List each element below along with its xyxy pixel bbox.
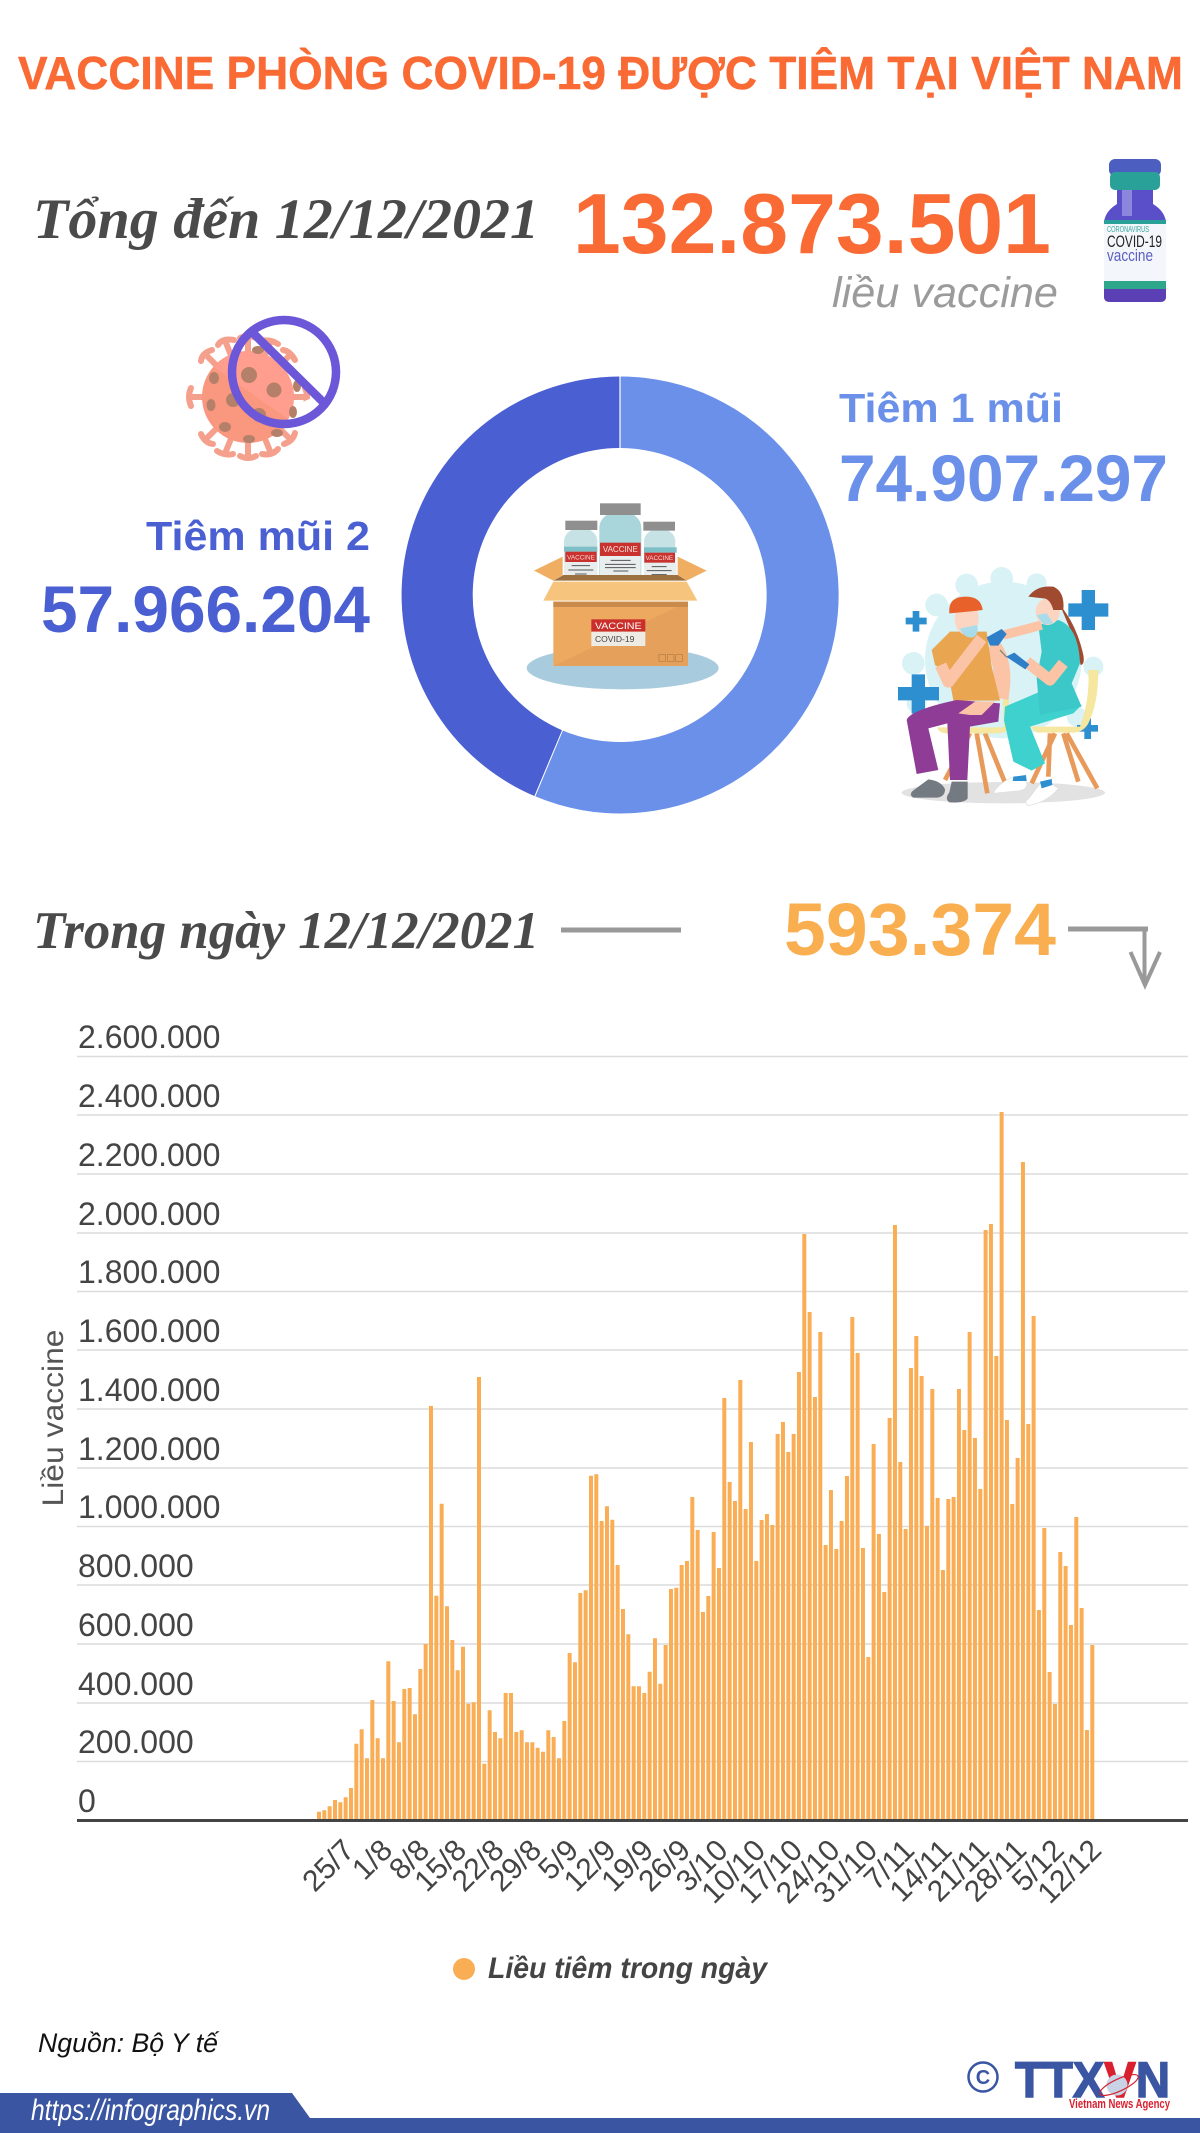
right vial	[643, 522, 677, 579]
y-axis labels: 600.000	[78, 1607, 194, 1643]
y-axis labels: 1.600.000	[78, 1313, 220, 1349]
x-axis date labels: 29/8	[483, 1834, 548, 1898]
dose 2 number: 57.966.204	[41, 572, 370, 646]
x-axis date labels: 22/8	[446, 1834, 510, 1898]
x-axis date labels: 8/8	[383, 1834, 436, 1886]
daily heading: Trong ngày 12/12/2021	[33, 902, 539, 960]
y-axis labels: 2.000.000	[78, 1196, 220, 1232]
footer band	[0, 2093, 1200, 2133]
x-axis date labels: 5/12	[1006, 1834, 1070, 1898]
x-axis date labels: 17/10	[733, 1834, 809, 1910]
y-axis labels: 1.200.000	[78, 1431, 220, 1467]
x-axis date labels: 25/7	[296, 1834, 361, 1898]
x-axis date labels: 1/8	[346, 1834, 399, 1886]
icon: vaccination illustration	[898, 567, 1108, 806]
total heading: Tổng đến 12/12/2021	[33, 188, 539, 251]
box label: COVID-19	[595, 634, 635, 644]
logo: TTXVN: TTXVN	[1015, 2052, 1170, 2108]
icon: vaccine vial: COVID-19	[1107, 232, 1162, 251]
left vial: VACCINE	[567, 554, 595, 561]
x-axis date labels: 15/8	[408, 1834, 473, 1898]
x-axis date labels: 5/9	[532, 1834, 585, 1886]
y-axis title: Liều vaccine	[37, 1330, 70, 1506]
x-axis date labels: 24/10	[770, 1834, 846, 1910]
y-axis labels: 1.000.000	[78, 1489, 220, 1525]
y-axis labels: 1.400.000	[78, 1372, 220, 1408]
y-axis labels: 2.600.000	[78, 1019, 220, 1055]
x-axis date labels: 19/9	[595, 1834, 660, 1898]
dose 1 number: 74.907.297	[839, 441, 1168, 515]
dose 1 label: Tiêm 1 mũi	[839, 385, 1063, 431]
footer url: https://infographics.vn	[31, 2094, 270, 2127]
x-axis date labels: 12/12	[1032, 1834, 1108, 1910]
y-axis labels: 2.200.000	[78, 1137, 220, 1173]
x-axis date labels: 14/11	[884, 1834, 958, 1908]
x-axis date labels: 21/11	[921, 1834, 996, 1908]
total number: 132.873.501	[573, 177, 1051, 272]
patient	[907, 597, 1002, 802]
segment: dose 2	[402, 376, 619, 796]
y-axis labels: 800.000	[78, 1548, 194, 1584]
left vial	[564, 521, 597, 579]
icon: vaccine box	[527, 503, 719, 689]
x-axis date labels: 10/10	[696, 1834, 772, 1910]
bar chart	[37, 1019, 1188, 1910]
connector line	[561, 928, 681, 932]
y-axis labels: 2.400.000	[78, 1078, 220, 1114]
plus signs	[898, 590, 1108, 739]
icon: vaccine vial: vaccine	[1107, 246, 1153, 265]
nurse	[987, 586, 1084, 806]
y-axis labels	[78, 1019, 220, 1819]
logo: TTXVN: C	[976, 2067, 990, 2089]
x-axis date labels	[296, 1834, 1108, 1910]
y-axis labels: 0	[78, 1783, 96, 1819]
icon: vaccine vial: CORONAVIRUS	[1107, 225, 1149, 234]
x-axis date labels: 12/9	[558, 1834, 622, 1898]
grid lines	[77, 1056, 1188, 1762]
x-axis date labels: 28/11	[958, 1834, 1033, 1908]
x-axis date labels: 26/9	[632, 1834, 697, 1898]
title: VACCINE PHÒNG COVID-19 ĐƯỢC TIÊM TẠI VIỆT NAM	[18, 47, 1183, 99]
x-axis date labels: 3/10	[670, 1834, 734, 1898]
chairs	[937, 663, 1098, 793]
y-axis labels: 200.000	[78, 1724, 194, 1760]
centre vial	[599, 503, 641, 580]
y-axis labels: 1.800.000	[78, 1254, 220, 1290]
centre vial: VACCINE	[603, 545, 638, 554]
x-axis date labels: 31/10	[808, 1834, 884, 1910]
daily dose bars	[319, 1112, 1092, 1820]
dose 2 label: Tiêm mũi 2	[146, 513, 370, 559]
box label: VACCINE	[595, 621, 642, 631]
x axis	[77, 1819, 1188, 1822]
icon: virus with ban sign	[189, 320, 336, 458]
total unit label: liều vaccine	[832, 269, 1058, 317]
right vial: VACCINE	[645, 555, 673, 562]
icon: vaccine vial	[1104, 159, 1166, 302]
box label	[591, 619, 645, 646]
source: Nguồn: Bộ Y tế	[38, 2028, 220, 2058]
y-axis labels: 400.000	[78, 1666, 194, 1702]
x-axis date labels: 7/11	[858, 1834, 921, 1897]
arrow down	[1068, 929, 1160, 985]
donut chart	[402, 376, 839, 813]
segment: dose 1	[535, 376, 839, 813]
legend: Liều tiêm trong ngày	[488, 1952, 768, 1985]
daily number: 593.374	[784, 888, 1056, 971]
